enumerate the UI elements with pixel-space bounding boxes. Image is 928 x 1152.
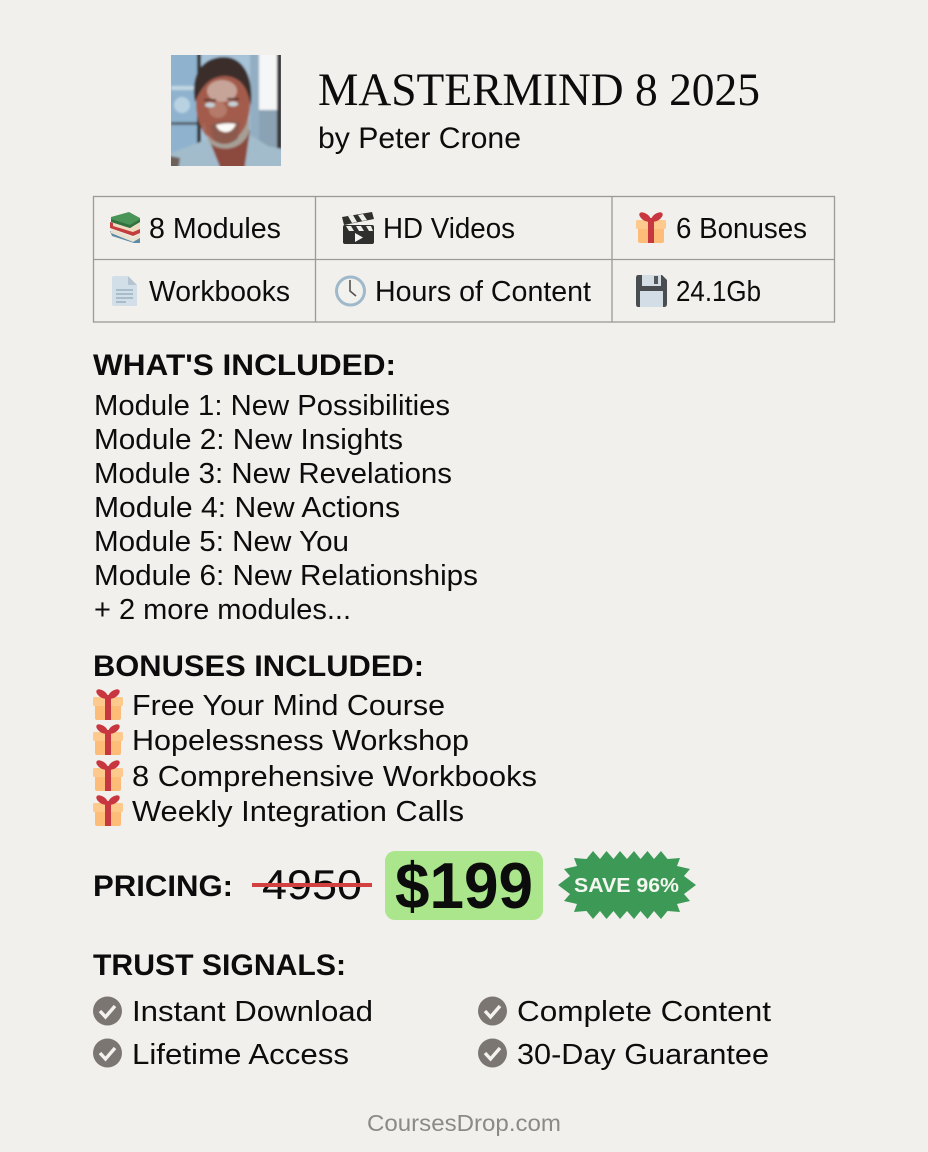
- bonus text: Weekly Integration Calls: [132, 796, 464, 828]
- strike line: [252, 883, 372, 887]
- current price box: $199: [395, 849, 533, 922]
- heading: WHAT'S INCLUDED:: [93, 349, 396, 382]
- module list: [94, 390, 478, 626]
- icon: check: [93, 996, 122, 1026]
- section: bonuses included: [93, 650, 537, 828]
- savings badge: SAVE 96%: [574, 875, 679, 897]
- neck: [210, 130, 250, 172]
- eyes: [205, 102, 215, 108]
- trust text: 30-Day Guarantee: [517, 1039, 769, 1071]
- icon: gift: [93, 687, 123, 720]
- title: MASTERMIND 8 2025: [318, 64, 760, 116]
- author: by Peter Crone: [318, 122, 521, 155]
- footer: CoursesDrop.com: [367, 1110, 561, 1136]
- icon: gift: [93, 758, 123, 791]
- section: trust signals: [93, 949, 771, 1071]
- section: what's included: [93, 349, 478, 626]
- module list: + 2 more modules...: [94, 594, 351, 626]
- icon: document: [112, 276, 137, 306]
- module list: Module 4: New Actions: [94, 492, 400, 524]
- old price: 4950: [262, 861, 362, 908]
- bonus text: Free Your Mind Course: [132, 690, 445, 722]
- cell text: 6 Bonuses: 6 Bonuses: [676, 213, 807, 245]
- head: [194, 74, 252, 142]
- icon: check: [93, 1038, 122, 1068]
- cell text: Hours of Content: Hours of Content: [375, 276, 591, 308]
- module list: Module 6: New Relationships: [94, 560, 478, 592]
- module list: Module 1: New Possibilities: [94, 390, 450, 422]
- icon: books: [110, 212, 140, 243]
- savings badge: [558, 851, 696, 919]
- features table: [94, 196, 834, 322]
- trust text: Instant Download: [132, 996, 373, 1028]
- cell text: Workbooks: Workbooks: [149, 276, 290, 308]
- bonus text: Hopelessness Workshop: [132, 725, 469, 757]
- module list: Module 5: New You: [94, 526, 349, 558]
- heading: PRICING:: [93, 870, 233, 903]
- hair: [194, 57, 251, 106]
- heading: TRUST SIGNALS:: [93, 949, 346, 982]
- heading: BONUSES INCLUDED:: [93, 650, 424, 683]
- icon: check: [478, 1038, 507, 1068]
- header: [171, 55, 758, 166]
- icon: gift: [636, 210, 666, 243]
- portrait photo: [171, 55, 281, 166]
- smile: [216, 123, 236, 132]
- trust text: Complete Content: [517, 996, 771, 1028]
- forehead highlight: [207, 80, 237, 102]
- icon: clock: [336, 277, 364, 305]
- icon: gift: [93, 793, 123, 826]
- module list: Module 3: New Revelations: [94, 458, 452, 490]
- icon: clapperboard: [342, 212, 374, 244]
- shirt: [171, 136, 281, 166]
- bonus text: 8 Comprehensive Workbooks: [132, 761, 537, 793]
- cell text: HD Videos: HD Videos: [383, 213, 515, 245]
- icon: check: [478, 996, 507, 1026]
- icon: gift: [93, 722, 123, 755]
- cell text: 24.1Gb: 24.1Gb: [676, 276, 761, 308]
- module list: Module 2: New Insights: [94, 424, 403, 456]
- trust text: Lifetime Access: [132, 1039, 349, 1071]
- icon: floppy disk: [636, 275, 667, 307]
- section: pricing: [93, 849, 696, 922]
- beard: [203, 118, 249, 149]
- cell text: 8 Modules: 8 Modules: [149, 213, 281, 245]
